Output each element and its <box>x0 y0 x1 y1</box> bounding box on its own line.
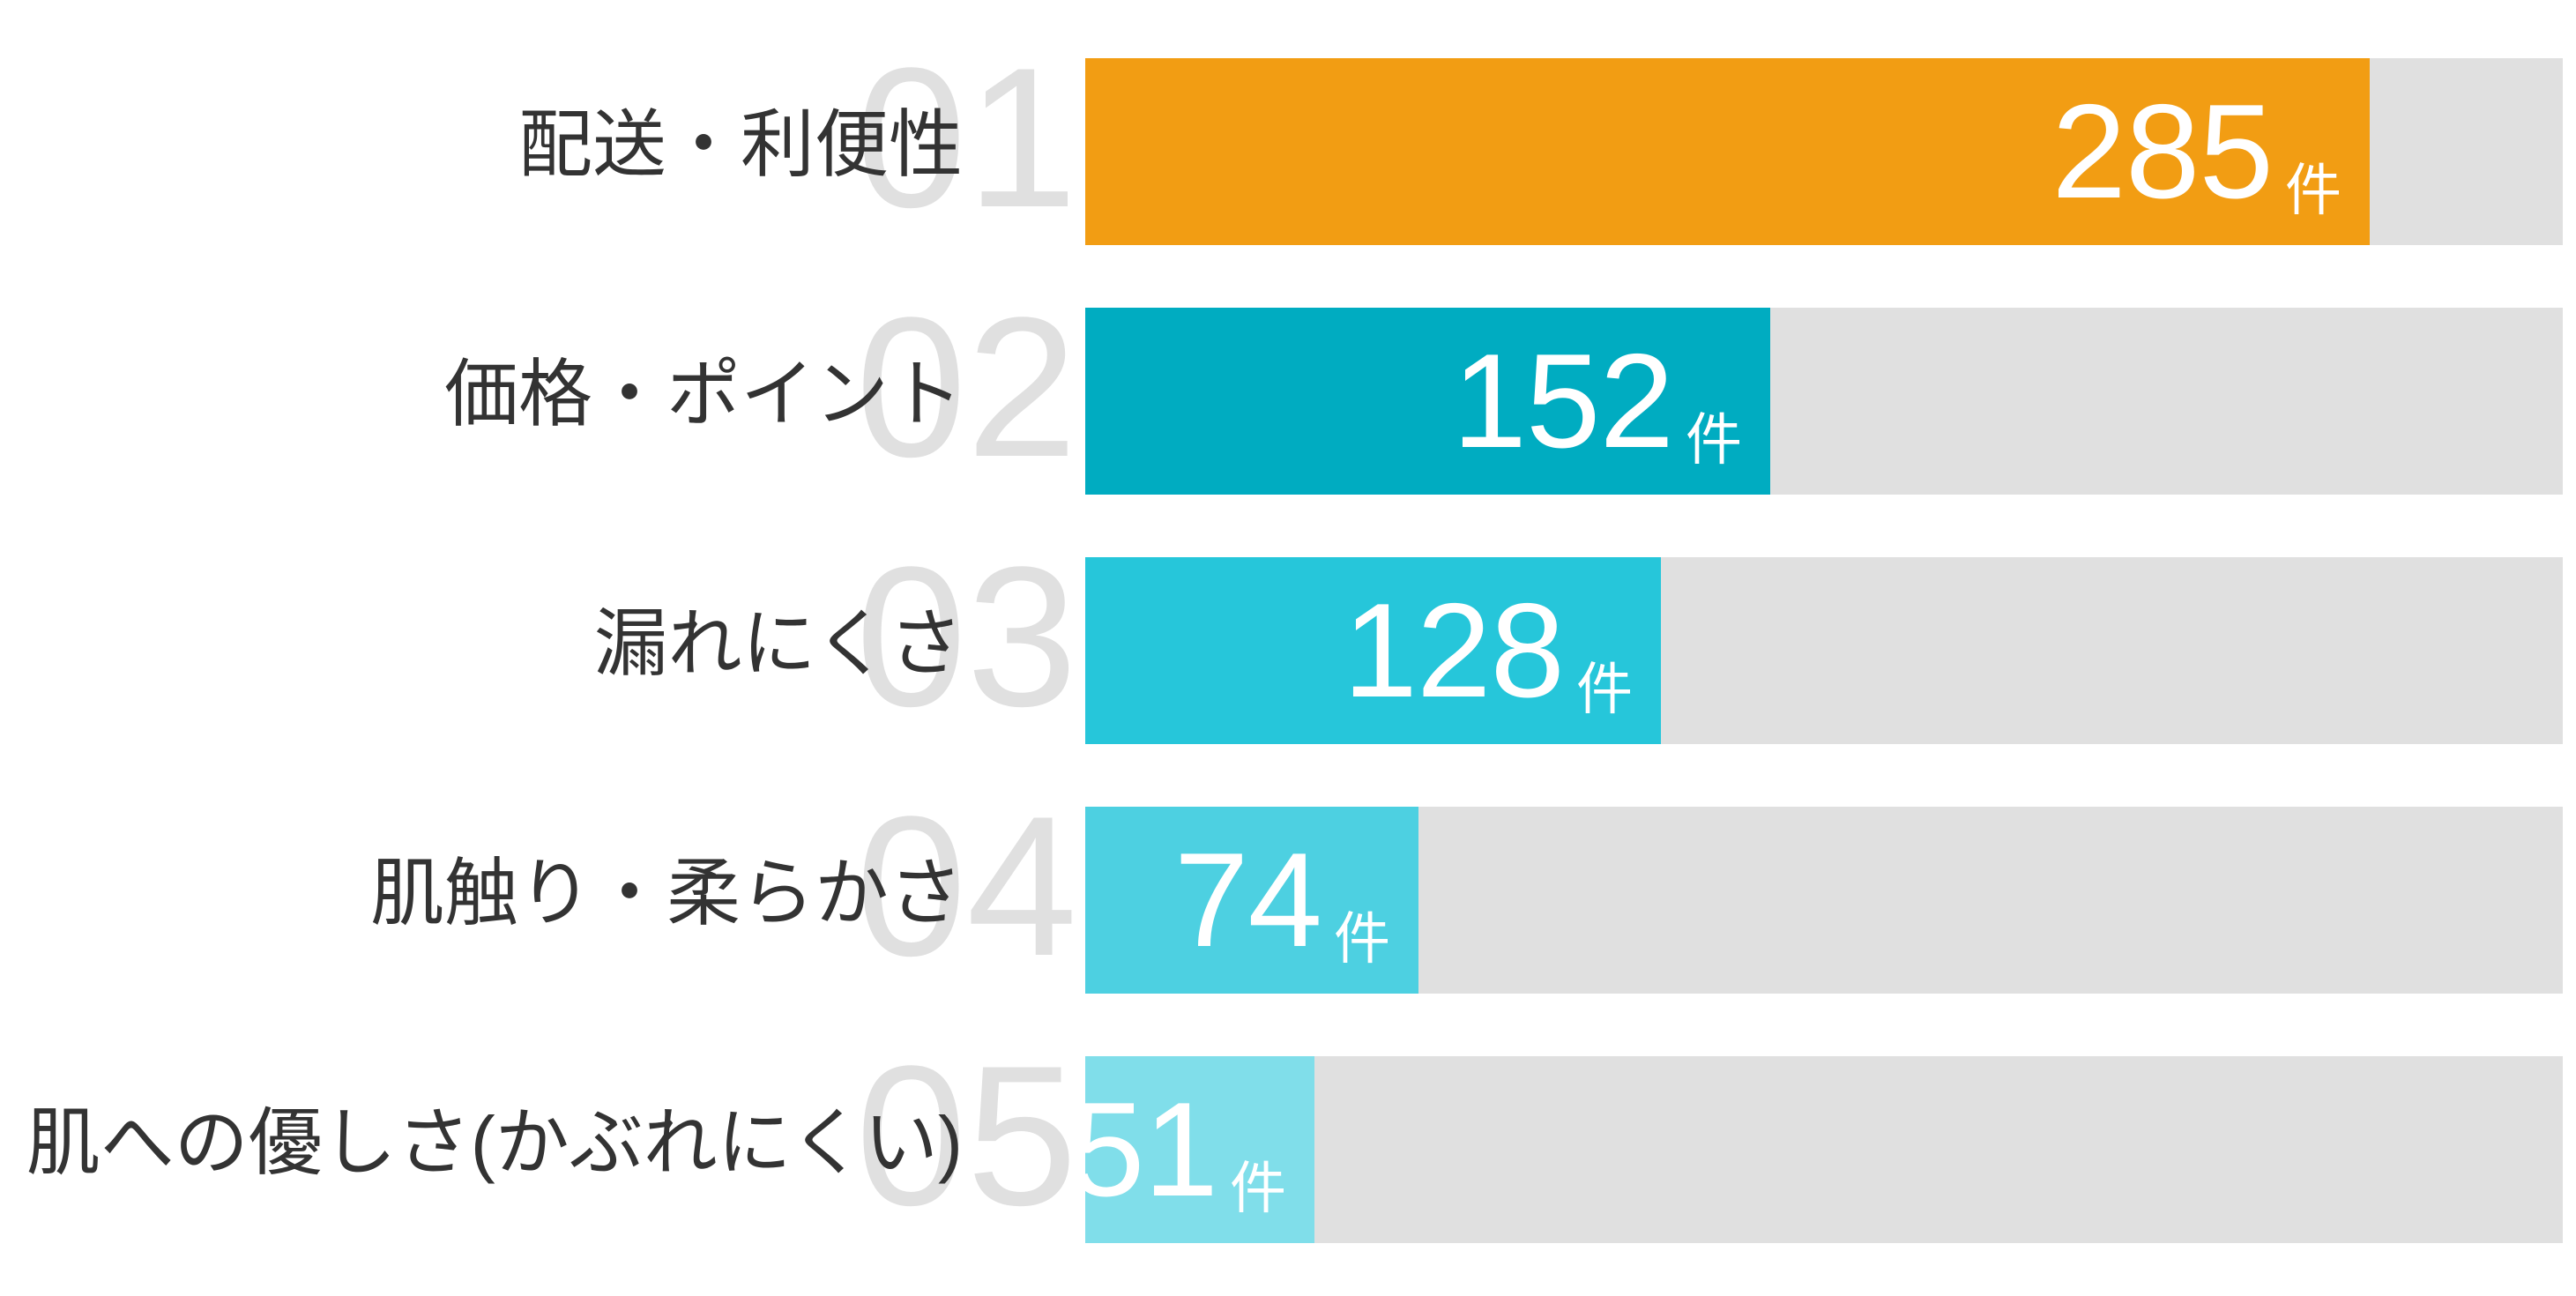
label: 配送・利便性: 配送・利便性 <box>518 103 963 186</box>
bar 4 <box>1085 807 2563 994</box>
row 1 <box>518 26 2563 249</box>
label: 肌触り・柔らかさ: 肌触り・柔らかさ <box>370 852 963 935</box>
label: 肌への優しさ: 肌への優しさ(かぶれにくい) <box>26 1101 963 1184</box>
rank number 04: 04 <box>856 774 1077 997</box>
rank number 05: 05 <box>856 1024 1077 1247</box>
label: 漏れにくさ: 漏れにくさ <box>594 602 963 685</box>
bar 1 <box>1085 58 2563 245</box>
rank number 03: 03 <box>856 525 1077 748</box>
bar 2 <box>1085 308 2563 495</box>
row 2 <box>444 275 2563 498</box>
rank number 01: 01 <box>856 26 1077 249</box>
row 3 <box>594 525 2563 748</box>
row 4 <box>370 774 2563 997</box>
row 5 <box>26 1024 2563 1247</box>
bar 3 <box>1085 557 2563 744</box>
bar 1: 285件 <box>2051 77 2341 227</box>
bar 5 <box>1085 1056 2563 1243</box>
bar 4: 74件 <box>1174 825 1390 975</box>
bar 3: 128件 <box>1343 576 1633 726</box>
label: 価格・ポイント: 価格・ポイント <box>444 353 963 436</box>
bar 2: 152件 <box>1452 326 1742 476</box>
rank number 02: 02 <box>856 275 1077 498</box>
